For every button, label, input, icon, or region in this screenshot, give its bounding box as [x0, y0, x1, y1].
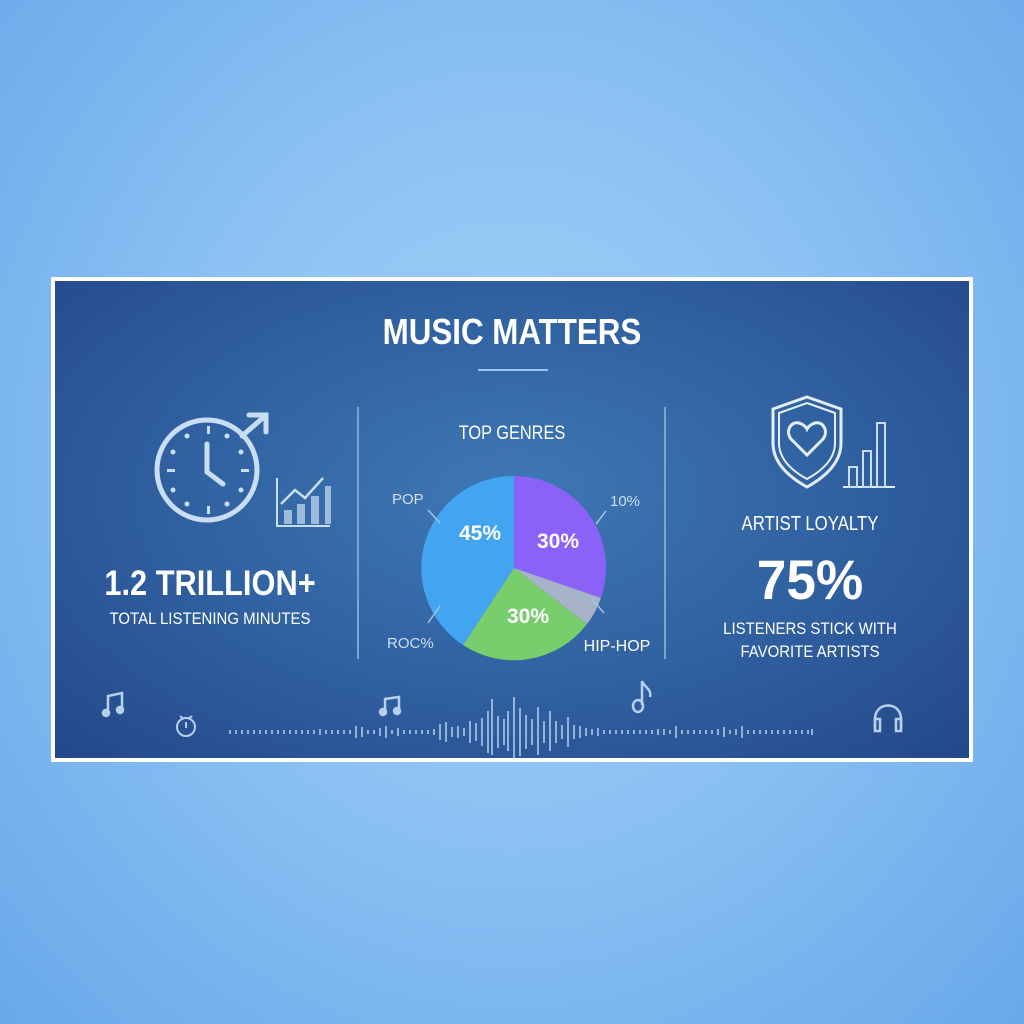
icon: shield with heart and bars [772, 395, 895, 489]
title: MUSIC MATTERS [383, 311, 641, 352]
chart: genre pie [387, 476, 650, 660]
chart: genre pie: 30% [537, 530, 579, 553]
chart: genre pie: 30% [507, 605, 549, 628]
chart: genre pie: ROC% [387, 635, 434, 652]
chart: genre pie: 10% [610, 493, 640, 510]
icon: clock with arrow and chart [154, 412, 331, 527]
icon: single note [633, 681, 650, 712]
title underline [478, 369, 548, 371]
label: artist loyalty: ARTIST LOYALTY [742, 513, 878, 535]
heading: top genres: TOP GENRES [459, 423, 565, 444]
divider left [357, 407, 359, 659]
icon: notes middle [380, 697, 400, 715]
waveform [230, 697, 812, 759]
label: listeners stick: LISTENERS STICK WITH [723, 619, 897, 638]
stat: listening minutes: 1.2 TRILLION+ [104, 564, 316, 603]
panel: main card [51, 277, 973, 762]
label: total listening minutes: TOTAL LISTENING MINUTES [110, 609, 310, 628]
stat: 75%: 75% [757, 548, 863, 611]
icon: headphones [875, 706, 901, 731]
icon: stopwatch [177, 716, 195, 736]
chart: genre pie: 45% [459, 522, 501, 545]
divider right [664, 407, 666, 659]
label: listeners stick: FAVORITE ARTISTS [740, 642, 880, 661]
icon: notes left [103, 693, 123, 716]
chart: genre pie: POP [392, 491, 424, 508]
decoration: waveform and music icons [102, 680, 902, 758]
chart: genre pie: HIP-HOP [584, 638, 650, 655]
label: listeners stick [723, 619, 897, 661]
